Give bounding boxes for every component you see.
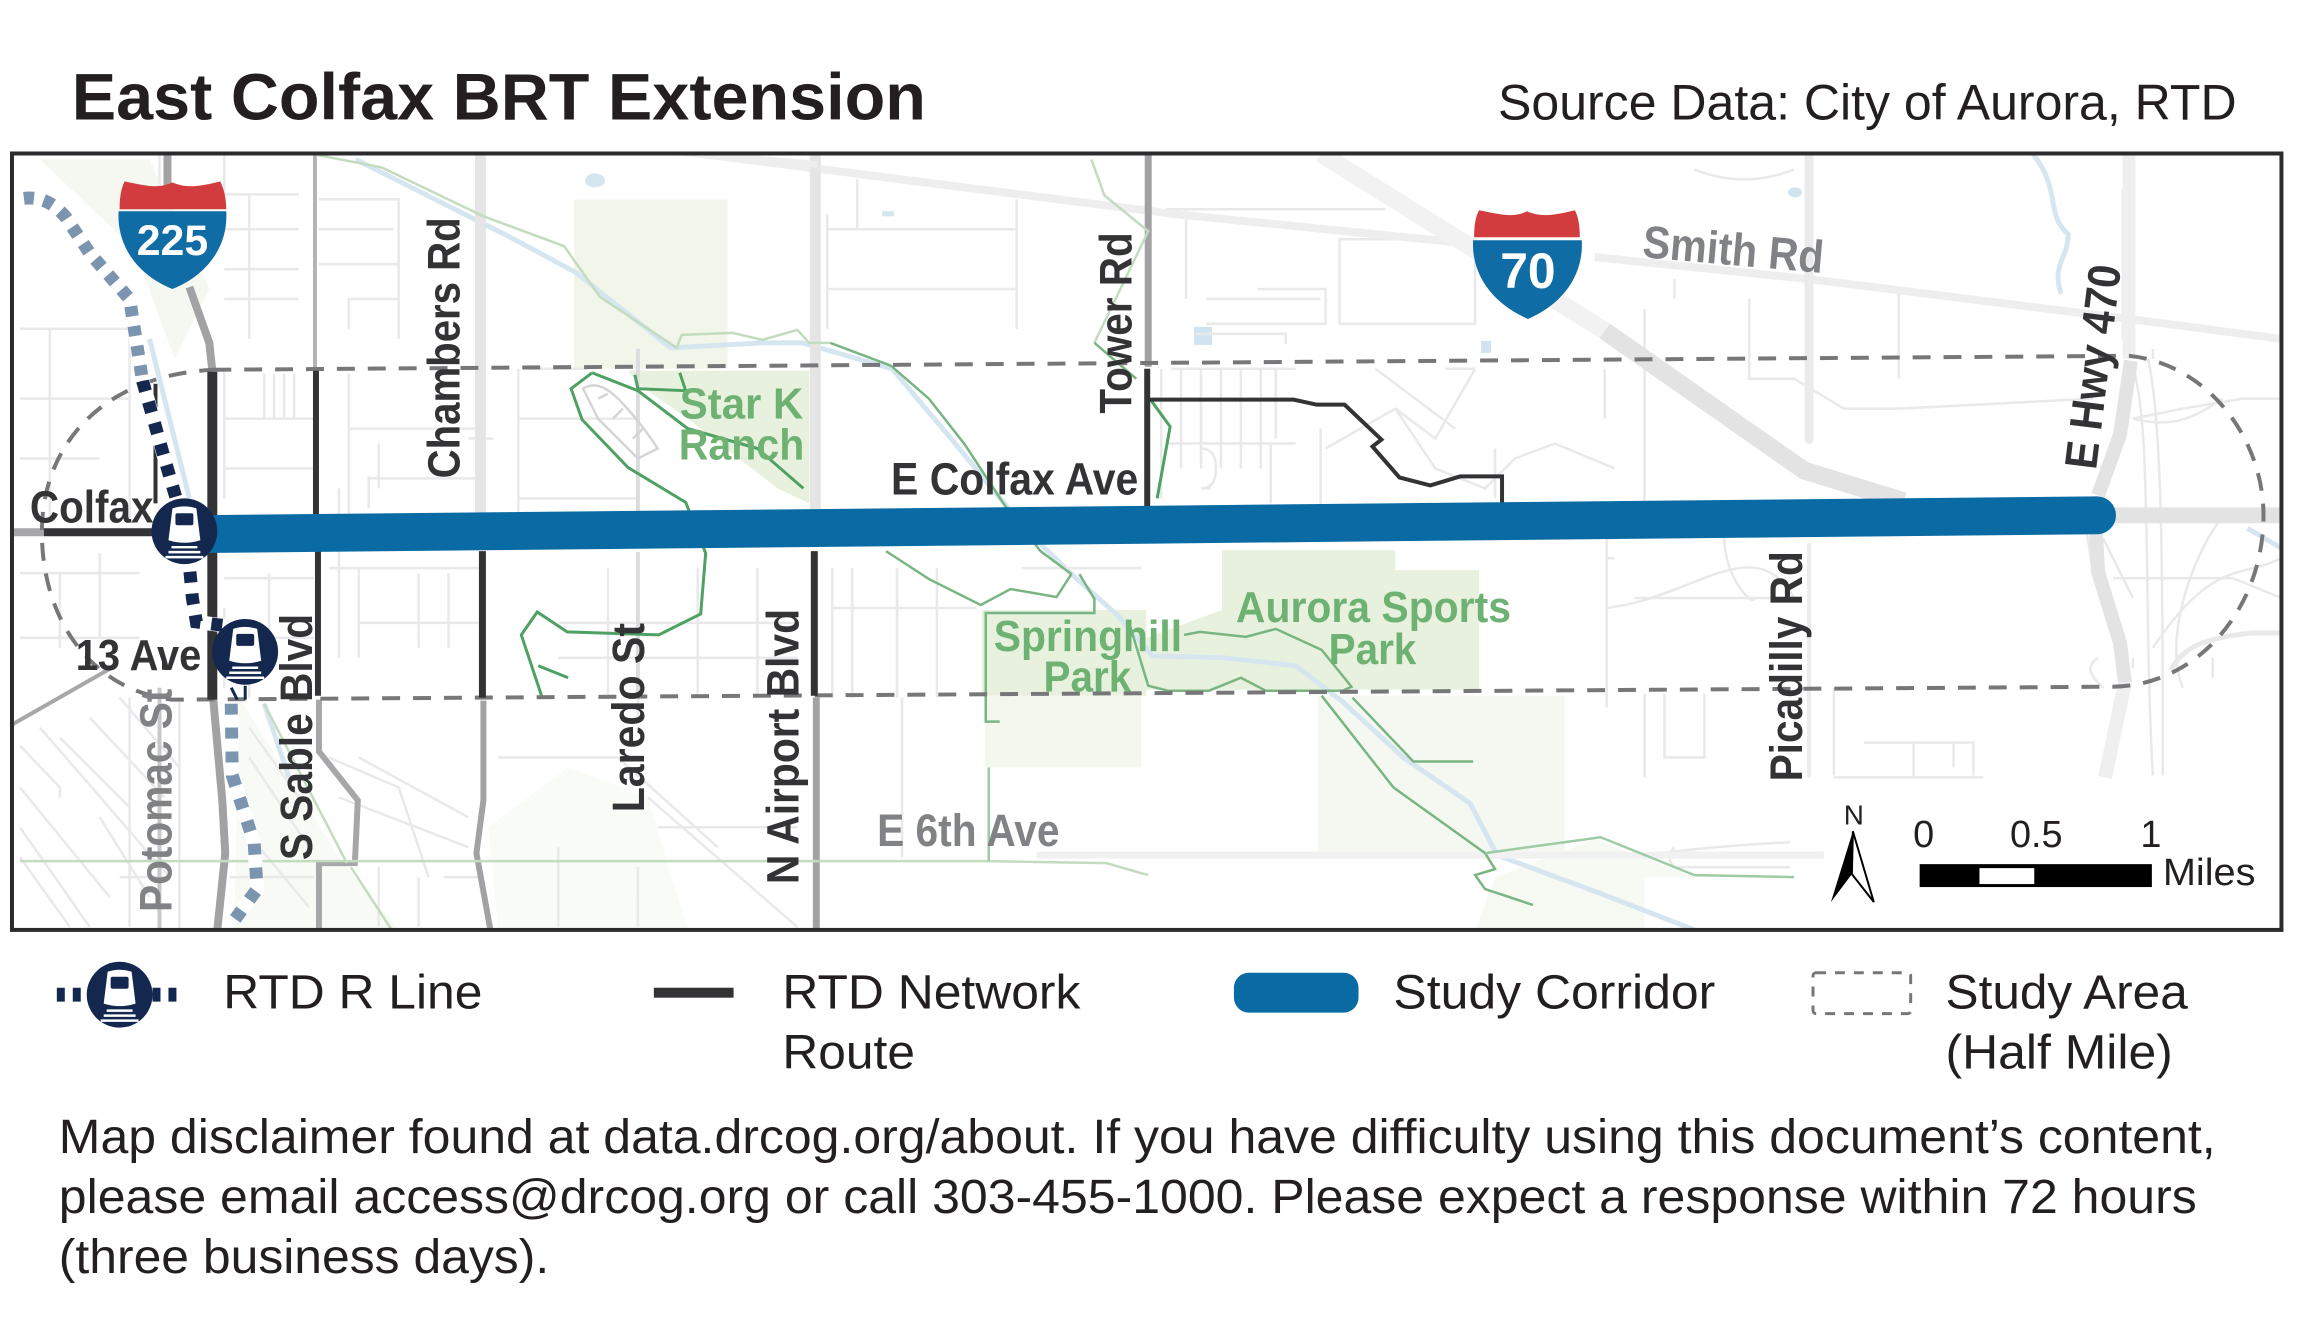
- park labels: Park: [1329, 625, 1417, 674]
- interstate 225 shield: [118, 181, 226, 289]
- north arrow: [1831, 799, 1874, 902]
- legend: Study Area: Study Area: [1946, 967, 2188, 1020]
- street labels: S Sable Blvd: [271, 614, 322, 860]
- legend: RTD Network Route: Route: [782, 1026, 915, 1079]
- park areas: [40, 159, 1694, 930]
- local streets: [20, 155, 2281, 930]
- study corridor: [189, 515, 2097, 534]
- street labels: E Colfax Ave: [891, 453, 1138, 504]
- faint trails north of the study area: [20, 154, 1148, 930]
- street labels: [30, 216, 2131, 912]
- water features: [150, 154, 2281, 930]
- map panel: [12, 150, 2281, 930]
- station: Colfax: [152, 498, 217, 564]
- interstate 70 shield: [1473, 210, 1582, 319]
- study area boundary: [42, 356, 2264, 700]
- street labels: Tower Rd: [1090, 232, 1141, 414]
- street labels: N Airport Blvd: [757, 609, 808, 884]
- park labels: Springhill: [994, 612, 1182, 661]
- legend: RTD Network Route: RTD Network: [782, 967, 1081, 1020]
- scale bar: [1914, 820, 2254, 888]
- scale bar: 0: [1913, 814, 1934, 856]
- map frame: [12, 153, 2281, 930]
- street labels: Smith Rd: [1641, 216, 1826, 283]
- scale bar: 0.5: [2010, 814, 2063, 856]
- park labels: Aurora Sports: [1236, 583, 1511, 632]
- interstate 225 shield: 225: [137, 217, 208, 265]
- legend: RTD R Line: RTD R Line: [223, 967, 482, 1020]
- small road stub under 13 Ave station: [231, 686, 245, 700]
- disclaimer text: please email access@drcog.org or call 303-455-1000. Please expect a response within 72 hours: [59, 1171, 2197, 1224]
- park labels: Star K: [680, 380, 804, 429]
- north arrow: N: [1844, 799, 1864, 830]
- scale bar: 1: [2140, 814, 2161, 856]
- park labels: Ranch: [679, 420, 804, 469]
- park labels: [679, 380, 1511, 702]
- street labels: Picadilly Rd: [1761, 551, 1812, 781]
- Star K Ranch loop trail: [521, 373, 1170, 698]
- street labels: Colfax: [30, 481, 154, 532]
- disclaimer text: [59, 1111, 2216, 1284]
- legend: RTD R Line: [57, 962, 482, 1028]
- legend: Study Area: [1813, 967, 2188, 1079]
- street labels: E 6th Ave: [877, 805, 1060, 856]
- disclaimer text: Map disclaimer found at data.drcog.org/about. If you have difficulty using this document’s content,: [59, 1111, 2216, 1164]
- legend: Study Corridor: Study Corridor: [1393, 967, 1715, 1020]
- disclaimer text: (three business days).: [59, 1231, 549, 1284]
- legend: RTD Network Route: [654, 967, 1081, 1079]
- street labels: 13 Ave: [76, 631, 201, 680]
- major roads: [12, 150, 2281, 930]
- scale bar: Miles: [2163, 852, 2256, 894]
- trails: [830, 343, 1794, 905]
- legend: Study Area: (Half Mile): [1946, 1026, 2173, 1079]
- source note: Source Data: City of Aurora, RTD: [1498, 75, 2237, 131]
- interstate 70 shield: 70: [1500, 243, 1556, 299]
- RTD network routes: [44, 369, 1502, 700]
- street labels: Potomac St: [130, 689, 181, 912]
- street labels: E Hwy 470: [2055, 262, 2131, 472]
- street labels: Chambers Rd: [418, 217, 469, 478]
- park labels: Park: [1044, 653, 1132, 702]
- RTD R Line: [24, 198, 257, 919]
- title: East Colfax BRT Extension: [72, 60, 926, 134]
- legend: Study Corridor: [1234, 967, 1715, 1020]
- street labels: Laredo St: [603, 623, 654, 812]
- station: 13 Ave: [212, 619, 278, 685]
- Star K neighbourhood streets: [583, 385, 658, 458]
